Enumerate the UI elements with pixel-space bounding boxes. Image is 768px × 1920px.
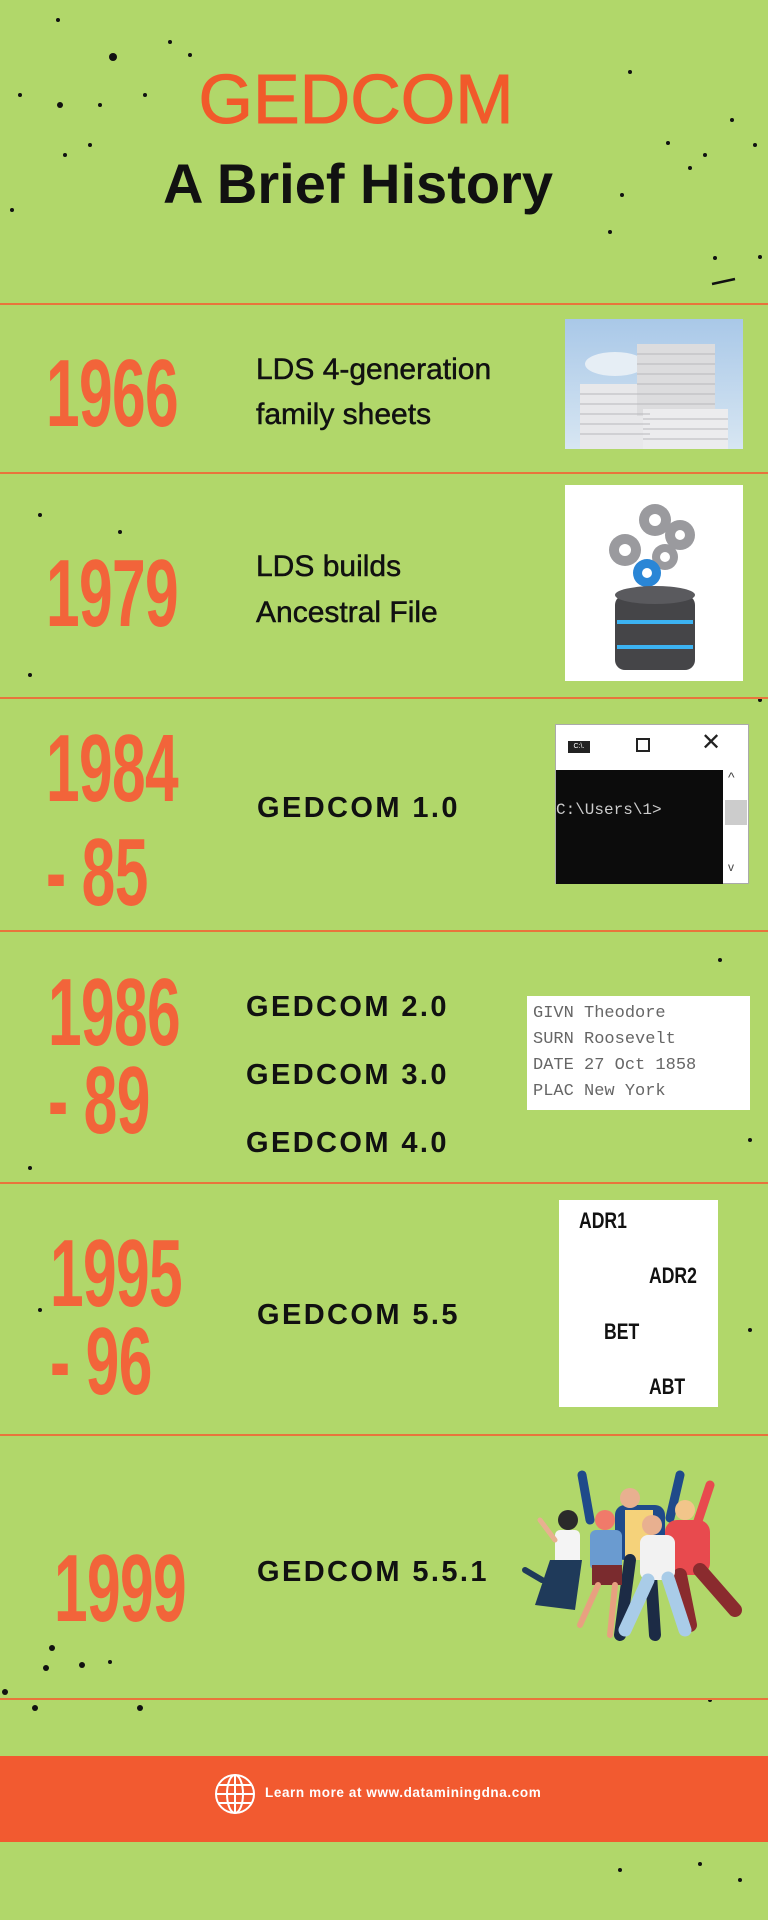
- footer text: Learn more at www.dataminingdna.com: [265, 1785, 541, 1800]
- year 1984 - 85: - 85: [46, 819, 148, 926]
- image: console window: v: [728, 860, 734, 874]
- image: tag names: ADR2: [649, 1263, 697, 1288]
- row: 1995-96: [50, 1200, 718, 1415]
- year 1984 - 85: [46, 715, 178, 926]
- image: console window: C:\.: [574, 743, 584, 750]
- year 1995 - 96: - 96: [50, 1308, 152, 1415]
- text: LDS family sheets: LDS 4-generation: [256, 353, 491, 386]
- text: GEDCOM 1.0: GEDCOM 1.0: [257, 792, 460, 824]
- text: LDS builds Ancestral File: Ancestral File: [256, 596, 438, 629]
- image: console window: ✕: [701, 729, 721, 756]
- image: tag names: ADR1: [579, 1208, 627, 1233]
- year 1995 - 96: [50, 1220, 182, 1415]
- row: 1984-85: [46, 715, 749, 926]
- icon: globe: [215, 1774, 255, 1814]
- row: 1999: [54, 1470, 742, 1642]
- image: tag names: ABT: [649, 1374, 685, 1399]
- year 1986 - 89: 1986: [48, 959, 180, 1066]
- year 1986 - 89: [48, 959, 180, 1154]
- year 1999: 1999: [54, 1535, 186, 1642]
- image: console window: [555, 724, 749, 884]
- row: 1986-89: [48, 959, 750, 1159]
- year 1986 - 89: - 89: [48, 1047, 150, 1154]
- title: GEDCOM: [198, 60, 514, 138]
- year 1966: 1966: [46, 340, 178, 447]
- text: LDS family sheets: [256, 353, 491, 431]
- text: GEDCOM 2.0 3.0 4.0: [246, 991, 449, 1159]
- year 1995 - 96: 1995: [50, 1220, 182, 1327]
- text: LDS builds Ancestral File: [256, 550, 438, 629]
- text: GEDCOM 2.0 3.0 4.0: GEDCOM 4.0: [246, 1127, 449, 1159]
- row: 1979: [46, 485, 743, 681]
- text: GEDCOM 2.0 3.0 4.0: GEDCOM 3.0: [246, 1059, 449, 1091]
- image: tag code sample: [527, 996, 750, 1110]
- year 1979: 1979: [46, 540, 178, 647]
- image: tag names: BET: [604, 1319, 639, 1344]
- image: console window: C:\Users\1>: [556, 801, 662, 819]
- subtitle: A Brief History: [163, 152, 553, 215]
- text: GEDCOM 2.0 3.0 4.0: GEDCOM 2.0: [246, 991, 449, 1023]
- image: console window: ^: [728, 769, 735, 785]
- text: GEDCOM 5.5.1: GEDCOM 5.5.1: [257, 1556, 489, 1588]
- image: tag names: [559, 1200, 718, 1407]
- year 1984 - 85: 1984: [46, 715, 178, 822]
- text: LDS family sheets: family sheets: [256, 398, 431, 431]
- image: tag code sample: GIVN Theodore SURN Roosevelt DATE 27 Oct 1858 PLAC New York: [533, 1004, 696, 1101]
- image: database with gears: [565, 485, 743, 681]
- row: 1966: [46, 319, 743, 449]
- text: GEDCOM 5.5: GEDCOM 5.5: [257, 1299, 460, 1331]
- text: LDS builds Ancestral File: LDS builds: [256, 550, 401, 583]
- footer band: [0, 1756, 768, 1842]
- illustration: happy people: [522, 1470, 742, 1641]
- image: paper stacks: [565, 319, 743, 449]
